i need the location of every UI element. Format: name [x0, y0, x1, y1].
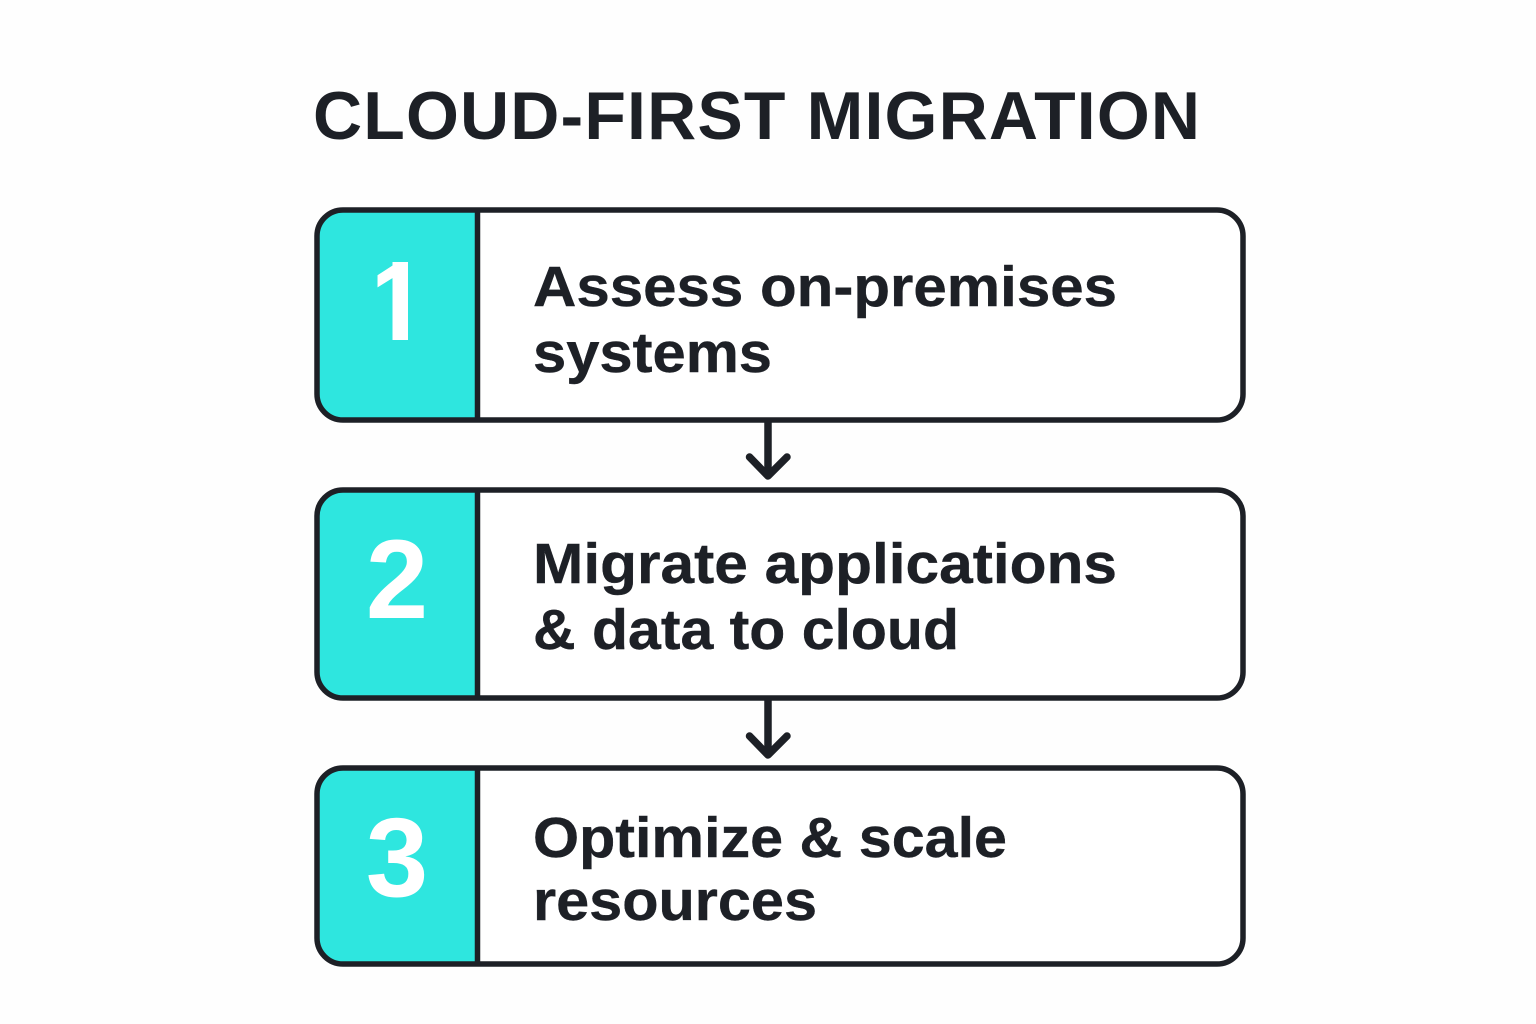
step 3 label: resources: [533, 869, 817, 933]
arrow: step 2 to step 3: [750, 699, 787, 755]
step 2 label: & data to cloud: [533, 598, 959, 662]
step 1 label: Assess on-premises: [533, 255, 1117, 319]
panel: step 1: [317, 210, 1243, 420]
step 3 divider: [475, 768, 480, 964]
step 1 number: 1: [370, 239, 432, 364]
step 2 number: 2: [366, 517, 428, 642]
step 2 outline: [317, 490, 1243, 698]
step 1 label: systems: [533, 321, 772, 385]
step 1 outline: [317, 210, 1243, 420]
panel: step 3: [317, 768, 1243, 964]
step 3 label: Optimize & scale: [533, 806, 1007, 870]
step 2 number block: [317, 490, 478, 698]
step 1 number: [378, 262, 408, 340]
title: CLOUD-FIRST MIGRATION: [313, 78, 1200, 154]
step 3 number block: [317, 768, 478, 964]
step 3 outline: [317, 768, 1243, 964]
panel: step 2: [317, 490, 1243, 698]
step 1 divider: [475, 210, 480, 420]
step 2 label: Migrate applications: [533, 532, 1117, 596]
step 3 number: 3: [366, 795, 428, 920]
arrow: step 1 to step 2: [750, 421, 787, 476]
step 1 number block: [317, 210, 478, 420]
step 2 divider: [475, 490, 480, 698]
